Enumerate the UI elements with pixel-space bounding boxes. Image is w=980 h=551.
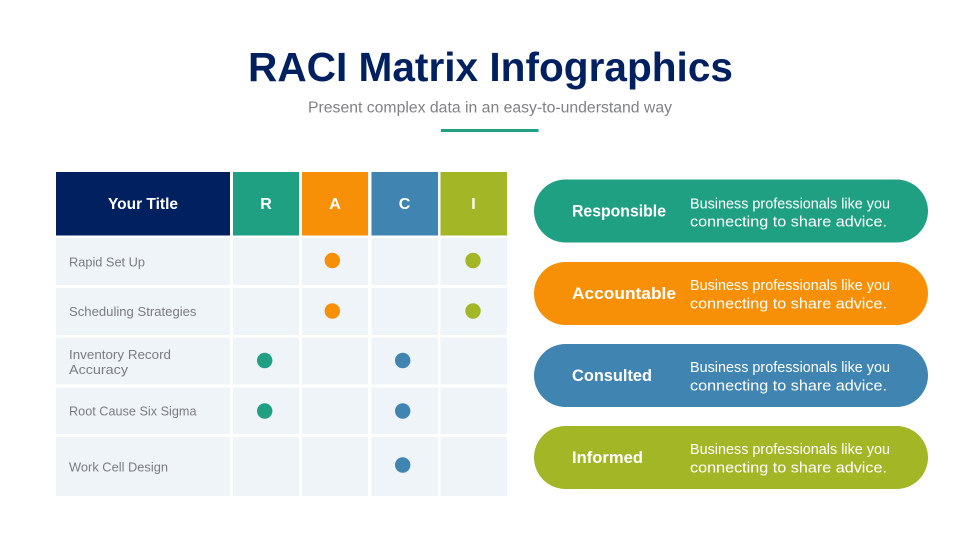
pill: Accountable: Accountable bbox=[572, 284, 676, 303]
row: Inventory Record Accuracy: Inventory Record bbox=[69, 347, 171, 362]
pill: Accountable bbox=[534, 262, 928, 325]
header cell: I: I bbox=[471, 196, 476, 213]
header cell: A bbox=[302, 172, 368, 236]
pill: Responsible: connecting to share advice. bbox=[690, 214, 887, 231]
pill: Consulted bbox=[534, 344, 928, 407]
row: Rapid Set Up: Rapid Set Up bbox=[69, 254, 145, 270]
title: RACI Matrix Infographics bbox=[248, 44, 733, 90]
row: Scheduling Strategies: Scheduling Strategies bbox=[69, 304, 197, 319]
pill: Informed: Informed bbox=[572, 448, 643, 467]
header cell: C: C bbox=[399, 196, 411, 213]
header cell: I bbox=[440, 172, 507, 236]
RACI matrix table bbox=[56, 172, 507, 496]
header cell: A: A bbox=[329, 196, 341, 213]
row: Work Cell Design: Work Cell Design bbox=[69, 460, 168, 475]
row: Rapid Set Up bbox=[56, 238, 507, 285]
table header row bbox=[56, 172, 507, 236]
row: Work Cell Design bbox=[56, 437, 507, 496]
title underline accent bbox=[441, 129, 538, 132]
pill: Informed bbox=[534, 426, 928, 489]
pill: Consulted: Business professionals like you bbox=[690, 359, 890, 376]
row: Inventory Record Accuracy: Accuracy bbox=[69, 362, 129, 377]
row: Inventory Record Accuracy bbox=[56, 338, 507, 384]
subtitle: Present complex data in an easy-to-understand way bbox=[308, 100, 672, 116]
header cell: R: R bbox=[260, 196, 272, 213]
pill: Responsible: Business professionals like you bbox=[690, 196, 890, 212]
pill: Responsible: Responsible bbox=[572, 202, 666, 221]
row: Root Cause Six Sigma bbox=[56, 388, 507, 434]
legend pills bbox=[534, 180, 928, 489]
pill: Consulted: connecting to share advice. bbox=[690, 378, 887, 394]
row: Root Cause Six Sigma: Root Cause Six Sigma bbox=[69, 404, 197, 419]
pill: Accountable: Business professionals like you bbox=[690, 277, 890, 294]
header cell: your title bbox=[56, 172, 230, 236]
pill: Informed: Business professionals like you bbox=[690, 441, 890, 458]
pill: Consulted: Consulted bbox=[572, 366, 652, 385]
pill: Informed: connecting to share advice. bbox=[690, 460, 887, 476]
pill: Accountable: connecting to share advice. bbox=[690, 296, 887, 312]
header cell: your title: Your Title bbox=[108, 196, 178, 213]
header cell: R bbox=[233, 172, 299, 236]
pill: Responsible bbox=[534, 180, 928, 242]
row: Scheduling Strategies bbox=[56, 288, 507, 335]
header cell: C bbox=[372, 172, 438, 236]
